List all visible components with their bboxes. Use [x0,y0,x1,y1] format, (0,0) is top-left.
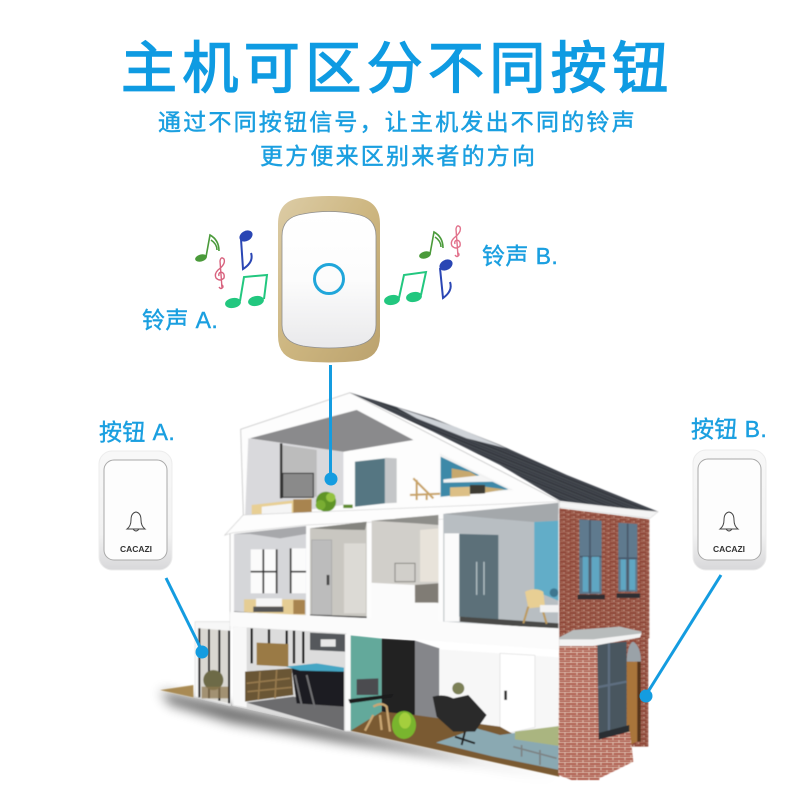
chair [525,589,545,608]
room 1 [234,526,306,617]
label: ringtone A: 铃声 A. [142,307,218,333]
bell icon [127,512,145,531]
floor slab [225,502,558,535]
upper window [355,458,385,507]
attic nook [440,453,513,497]
room: lounge [351,641,559,777]
bell icon [720,512,738,531]
subtitle [158,109,637,169]
attic room [245,410,413,519]
button B remote [693,450,766,570]
brick wall [559,508,649,638]
room 4 [443,503,559,629]
slab band [230,612,558,638]
connector line: main unit to house [324,365,338,486]
white house shell [225,393,560,638]
entry frame [195,622,230,705]
roof [350,393,658,512]
title: 主机可区分不同按钮 [121,37,674,100]
label: button B: 按钮 B. [691,416,767,442]
ground shadow [160,691,560,778]
subtitle: 更方便来区别来者的方向 [260,143,537,169]
upper floors [225,393,658,638]
left wood floor [160,685,193,697]
label: ringtone B: 铃声 B. [482,243,558,269]
staircase rail [410,478,450,500]
room: bar [233,627,347,731]
pillar [345,634,351,731]
room 3 [372,515,438,622]
room 2 [310,522,367,617]
lounge chair [433,695,487,732]
button A remote: CACAZI [120,544,152,554]
music notes left [194,228,267,309]
eave [559,502,658,518]
label: button A: 按钮 A. [99,419,175,445]
button A remote [99,451,172,570]
button B remote: CACAZI [713,544,745,554]
indicator ring [314,264,344,294]
sofa [515,726,559,746]
upper slab band [230,613,559,650]
study chair and plant [365,704,390,732]
brick chimney and porch [558,600,648,780]
connector line: button A to house [166,578,208,658]
music notes right [383,226,460,306]
subtitle: 通过不同按钮信号，让主机发出不同的铃声 [158,109,637,135]
main unit: doorbell receiver [278,196,380,362]
ground floor [160,600,648,780]
room: study [348,635,415,731]
house illustration [160,393,658,780]
connector line: button B to house [640,575,721,702]
